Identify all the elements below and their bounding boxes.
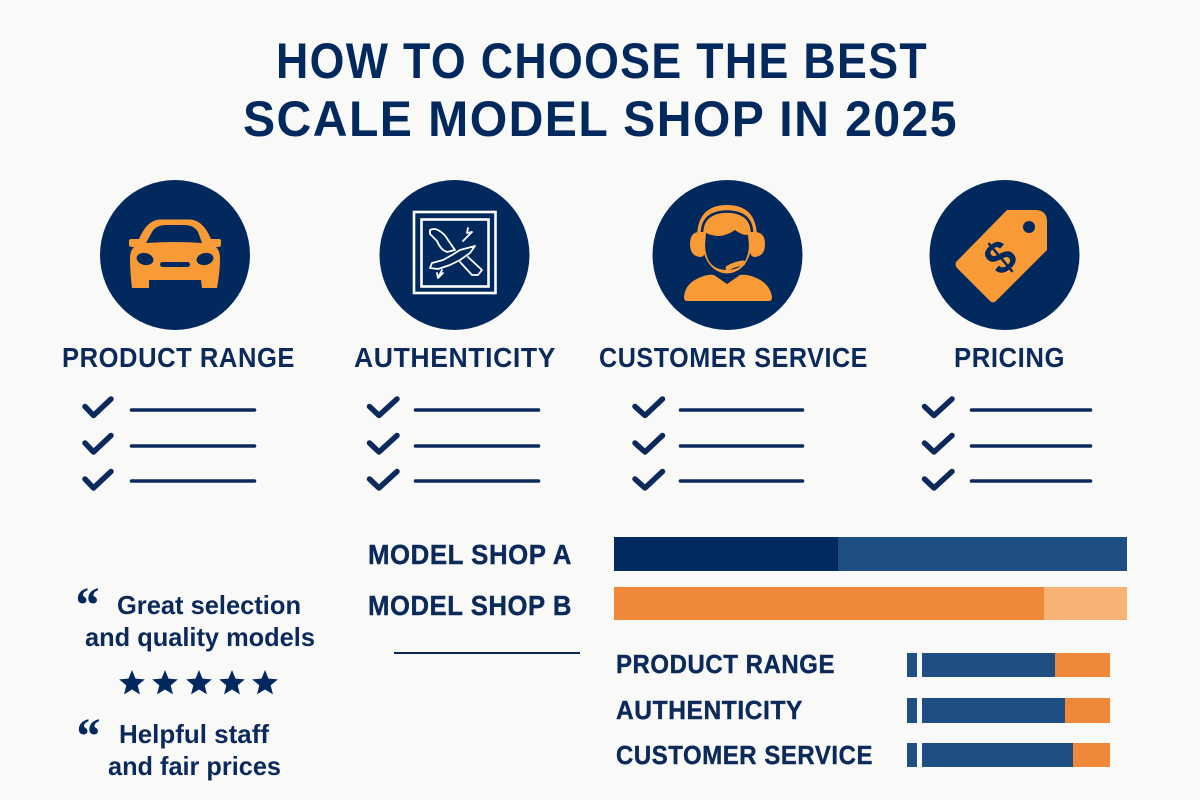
panel: customer service (599, 180, 868, 488)
heading: product range: PRODUCT RANGE (62, 342, 295, 373)
row: model shop a: MODEL SHOP A (368, 539, 572, 570)
icon: car (100, 180, 250, 330)
panel: testimonials (73, 578, 315, 781)
panel: pricing (924, 180, 1090, 488)
checklist: authenticity (370, 399, 538, 488)
title (243, 33, 958, 147)
row: authenticity (616, 697, 1110, 725)
quote: helpful staff: Helpful staff (119, 719, 269, 749)
row: customer service (616, 742, 1110, 770)
row: model shop a (368, 537, 1127, 571)
icon: price tag: $ (973, 229, 1027, 285)
row: model shop b (368, 587, 1127, 621)
quote: great selection: Great selection (117, 590, 301, 620)
row: product range (616, 651, 1110, 679)
title: SCALE MODEL SHOP IN 2025 (243, 91, 958, 147)
quote: helpful staff: “ (74, 709, 100, 765)
checklist: pricing (924, 399, 1090, 488)
panel: product range (62, 180, 295, 488)
row: customer service: CUSTOMER SERVICE (616, 742, 873, 770)
row: model shop b: MODEL SHOP B (368, 590, 572, 621)
quote: great selection: and quality models (85, 622, 315, 652)
quote: great selection (73, 578, 315, 652)
quote: great selection: “ (73, 578, 98, 634)
row: product range: PRODUCT RANGE (616, 651, 835, 679)
heading: customer service: CUSTOMER SERVICE (599, 342, 868, 373)
star rating (119, 670, 278, 694)
icon: price tag (930, 180, 1080, 330)
icon: framed model plane (380, 180, 530, 330)
checklist: product range (85, 399, 254, 488)
heading: pricing: PRICING (954, 342, 1065, 373)
quote: helpful staff (74, 709, 281, 781)
checklist: customer service (635, 399, 802, 488)
panel: shop comparison (368, 537, 1127, 621)
panel: criteria breakdown (616, 651, 1110, 770)
row: authenticity: AUTHENTICITY (616, 697, 803, 725)
panel: authenticity (354, 180, 556, 488)
heading: authenticity: AUTHENTICITY (354, 342, 556, 373)
title: HOW TO CHOOSE THE BEST (276, 33, 928, 89)
icon: support agent headset (652, 180, 802, 330)
quote: helpful staff: and fair prices (108, 751, 281, 781)
